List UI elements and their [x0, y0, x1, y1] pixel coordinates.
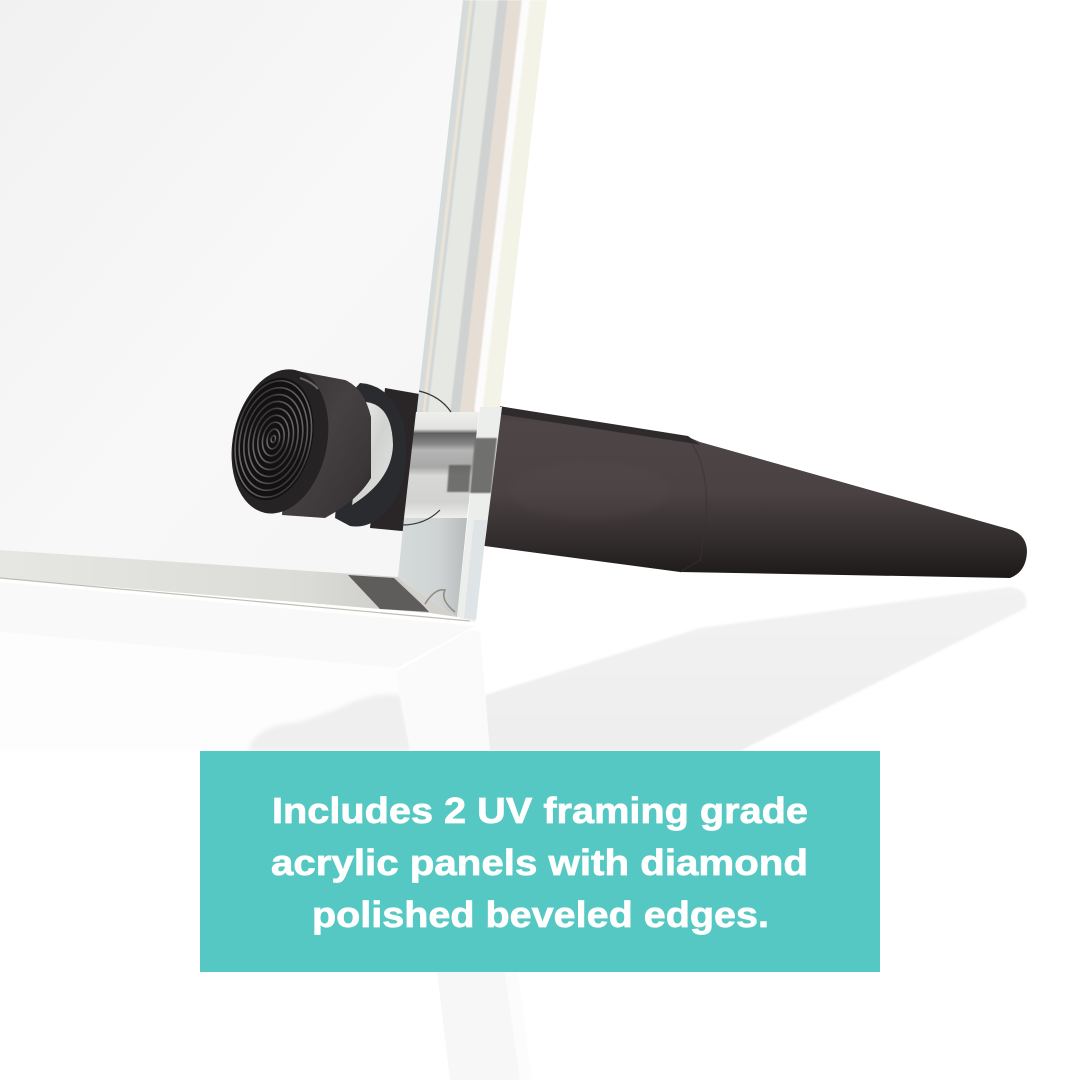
caption text: Includes 2 UV framing grade: [272, 790, 808, 831]
silver bolt collar: [352, 402, 393, 505]
caption text: acrylic panels with diamond: [271, 842, 808, 883]
acrylic panel front face: [0, 0, 465, 577]
teal caption box: [200, 751, 880, 972]
acrylic panel side edge stripes: [416, 0, 547, 498]
acrylic hole with bolt refraction: [398, 391, 479, 617]
screw cap with concentric grooves: [219, 360, 371, 523]
acrylic corner strip: [457, 407, 502, 622]
pen body: [470, 406, 1027, 578]
beveled bottom edge: [0, 550, 470, 621]
black retaining ring: [335, 383, 406, 527]
reflection on table: [0, 582, 1027, 1080]
caption text: [271, 790, 808, 935]
caption text: polished beveled edges.: [312, 894, 769, 935]
pen shaft seen through panel: [370, 388, 425, 532]
